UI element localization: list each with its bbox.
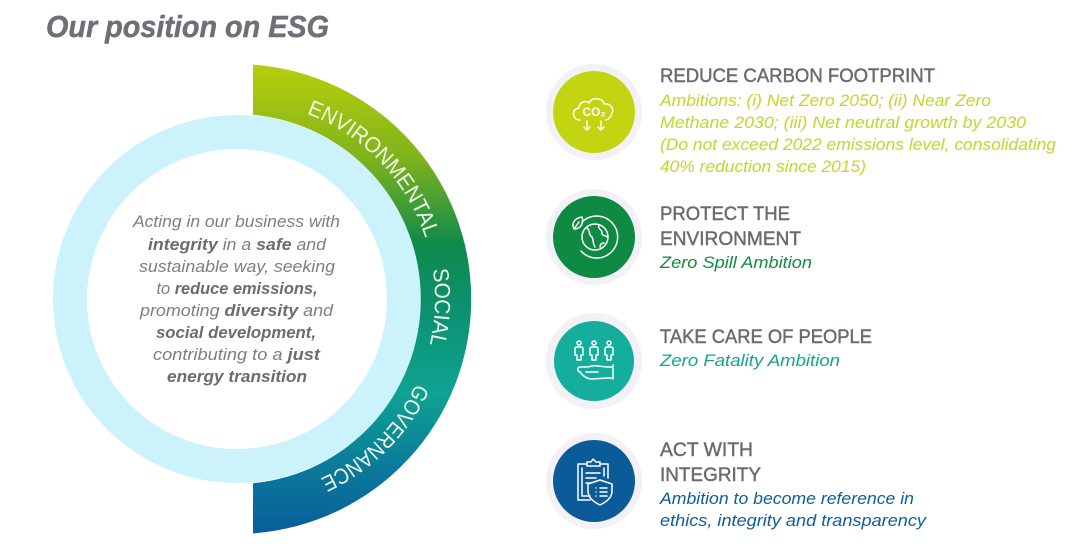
item: act with integrity: INTEGRITY: [660, 464, 761, 486]
centre statement: sustainable way, seeking: [139, 257, 336, 276]
centre statement: [132, 212, 340, 386]
ambitions text: Methane 2030; (iii) Net neutral growth by 2030: [660, 114, 1027, 132]
arc label: environmental: ENVIRONMENTAL: [308, 100, 438, 238]
ambitions text: 40% reduction since 2015): [660, 158, 866, 176]
centre statement: integrity in a safe and: [148, 235, 327, 254]
ambitions text: (Do not exceed 2022 emissions level, consolidating: [660, 136, 1057, 154]
heading: ACT WITH: [660, 439, 753, 461]
item: act with integrity: [546, 433, 928, 530]
heading: REDUCE CARBON FOOTPRINT: [660, 65, 935, 87]
gradient outer arc: [253, 65, 471, 533]
ambition text: Zero Fatality Ambition: [659, 352, 840, 370]
centre statement: promoting diversity and: [139, 301, 334, 320]
icon: clipboard and shield: [546, 433, 642, 529]
ambition text: [659, 490, 928, 530]
item: protect the environment: [546, 189, 812, 285]
title: Our position on ESG: [46, 9, 329, 44]
heading: PROTECT THE: [660, 203, 790, 225]
arc label: governance: GOVERNANCE: [321, 386, 428, 492]
ambition text: Ambition to become reference in: [659, 490, 914, 508]
icon: CO2 cloud: CO₂: [582, 105, 606, 119]
item: take care of people: [546, 313, 872, 409]
ambition text: Zero Spill Ambition: [659, 254, 812, 272]
ambition text: ethics, integrity and transparency: [660, 512, 928, 530]
icon: earth and leaf: [546, 189, 642, 285]
centre statement: contributing to a just: [153, 345, 321, 364]
ESG wheel: [53, 64, 472, 534]
centre statement: Acting in our business with: [132, 212, 340, 231]
ambitions text: Ambitions: (i) Net Zero 2050; (ii) Near Zero: [659, 92, 991, 110]
arc label: social: SOCIAL: [430, 270, 450, 344]
item: reduce carbon footprint: [546, 64, 1057, 176]
heading: TAKE CARE OF PEOPLE: [660, 326, 872, 348]
light blue inner ring: [70, 132, 404, 466]
ambitions text: [659, 92, 1057, 176]
centre statement: to reduce emissions,: [156, 279, 318, 298]
icon: people on hand: [546, 313, 642, 409]
centre statement: energy transition: [167, 367, 307, 386]
icon: CO2 cloud: [546, 64, 642, 160]
centre statement: social development,: [156, 323, 316, 342]
item: protect the environment: ENVIRONMENT: [660, 228, 801, 250]
